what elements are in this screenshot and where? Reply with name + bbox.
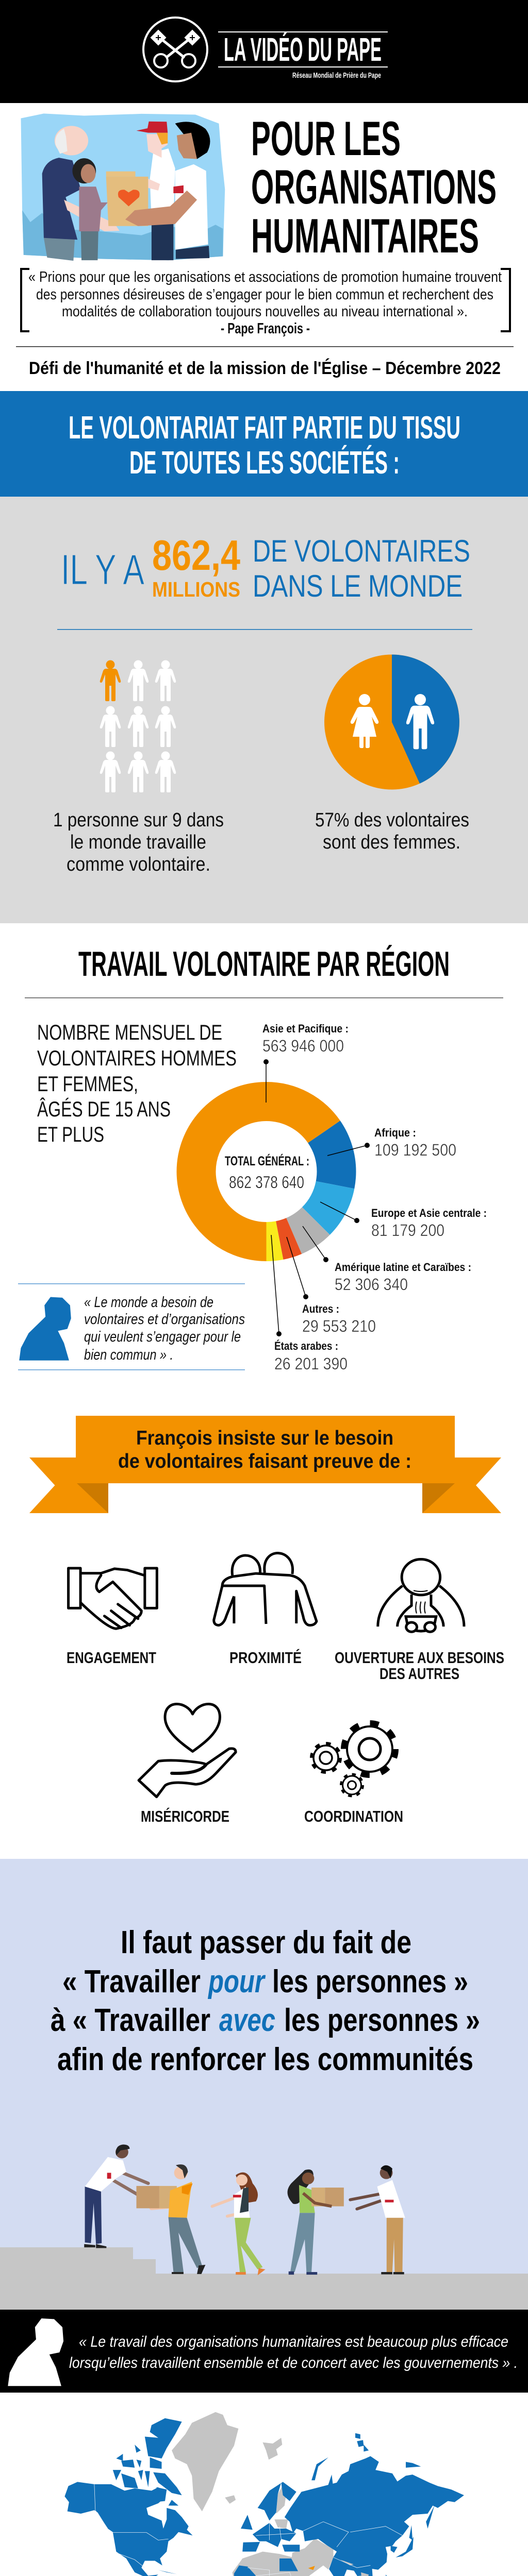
region labels: Afrique :: [374, 1126, 416, 1139]
label: openness: DES AUTRES: [380, 1665, 459, 1683]
figure 2: [169, 2164, 205, 2274]
stat text: women share: 57% des volontaires: [315, 809, 469, 831]
headline number: DANS LE MONDE: [253, 569, 463, 603]
world map: [64, 2412, 464, 2576]
label: coordination: COORDINATION: [304, 1807, 403, 1825]
black quote band: [0, 2310, 528, 2393]
figure 1: [84, 2145, 129, 2248]
panel: global volunteer stats: [0, 497, 528, 923]
text block: monthly number: NOMBRE MENSUEL DE: [37, 1020, 222, 1044]
arctic islands: [145, 2418, 182, 2459]
heading: les personnes »: [272, 1964, 468, 1999]
label: mercy: MISÉRICORDE: [141, 1807, 229, 1825]
grey countries: [172, 2412, 451, 2576]
region labels: 563 946 000: [262, 1037, 344, 1055]
figure 4: [288, 2170, 344, 2275]
donut chart: regions: 862 378 640: [229, 1173, 304, 1192]
ground and steps: [0, 2247, 528, 2310]
stat text: one in nine: le monde travaille: [70, 832, 206, 853]
ribbon heading: François insiste sur le besoin: [136, 1427, 393, 1449]
quote text: volontaires et d’organisations: [84, 1311, 245, 1328]
text block: monthly number: ÂGÉS DE 15 ANS: [37, 1097, 171, 1121]
stat text: women share: sont des femmes.: [323, 832, 460, 853]
heading: [51, 1925, 480, 2077]
region labels: 109 192 500: [374, 1141, 456, 1159]
japan and korea: [391, 2525, 414, 2557]
ribbon heading: [29, 1416, 501, 1513]
scandinavia and europe: [258, 2482, 296, 2520]
callout: quote on volunteers: [18, 1283, 245, 1370]
illustration: volunteers passing boxes: [84, 2145, 405, 2275]
text block: monthly number: VOLONTAIRES HOMMES: [37, 1046, 237, 1070]
heading: à « Travailler: [51, 2003, 210, 2038]
north america: [64, 2482, 193, 2576]
logo subtitle: Réseau Mondial de Prière du Pape: [292, 71, 381, 80]
region labels: États arabes :: [274, 1340, 338, 1352]
headline number: MILLIONS: [152, 578, 240, 601]
icon: gears: [312, 1723, 395, 1795]
leader lines: [263, 1059, 370, 1336]
prayer quote with brackets: - Pape François -: [221, 320, 310, 337]
figure 3: [234, 2173, 266, 2275]
region labels: 26 201 390: [274, 1354, 348, 1373]
headline number: [61, 531, 470, 603]
pictogram: one in nine people: [100, 660, 176, 792]
quote text: bien commun » .: [84, 1347, 173, 1363]
region labels: Europe et Asie centrale :: [371, 1207, 487, 1219]
logo: crossed keys: [143, 18, 207, 81]
heading: les personnes »: [284, 2003, 480, 2038]
stat text: one in nine: [53, 809, 224, 875]
quote text: qui veulent s’engager pour le: [84, 1329, 241, 1345]
stat text: one in nine: 1 personne sur 9 dans: [53, 809, 224, 831]
stat text: women share: [315, 809, 469, 853]
main title: [251, 111, 497, 263]
figure 5: [377, 2165, 405, 2274]
logo rule bottom: [218, 66, 388, 67]
country borders: [94, 2484, 402, 2576]
logo title: LA VIDÉO DU PAPE: [224, 31, 382, 68]
grey overlays: [161, 2560, 384, 2576]
region labels: 52 306 340: [335, 1275, 408, 1294]
icon: embrace: [214, 1553, 317, 1625]
blue countries: [64, 2418, 464, 2576]
prayer quote with brackets: modalités de collaboration toujours nouvelles au niveau international ».: [62, 303, 468, 320]
label: openness: [335, 1649, 504, 1683]
logo rule top: [218, 31, 388, 32]
panel: working with people: [0, 1859, 528, 2310]
pie chart: women share: [324, 654, 459, 789]
region labels: Amérique latine et Caraïbes :: [335, 1261, 471, 1274]
header band: [0, 0, 528, 103]
ribbon heading: de volontaires faisant preuve de :: [118, 1450, 411, 1472]
heading: avec: [219, 2003, 275, 2038]
heading: pour: [207, 1964, 266, 1999]
africa parts: [279, 2558, 298, 2571]
donut chart: regions: [196, 1022, 487, 1373]
icon: handshake: [69, 1568, 157, 1629]
eurasia: [285, 2456, 464, 2576]
headline number: DE VOLONTAIRES: [253, 534, 470, 568]
text block: monthly number: [37, 1020, 237, 1146]
headline number: IL Y A: [61, 546, 144, 594]
text block: monthly number: ET FEMMES,: [37, 1072, 138, 1096]
illustration: volunteers handing a box: [21, 113, 225, 261]
donut chart: regions: TOTAL GÉNÉRAL :: [225, 1154, 309, 1168]
region labels: 29 553 210: [302, 1317, 376, 1335]
south east asia: [386, 2574, 394, 2576]
stat text: one in nine: comme volontaire.: [67, 854, 210, 875]
label: engagement: ENGAGEMENT: [67, 1649, 156, 1667]
quote text: « Le monde a besoin de: [84, 1294, 213, 1311]
box 1: [137, 2186, 177, 2208]
blue banner: [0, 391, 528, 497]
quote text: [69, 2333, 518, 2371]
icon: open person with cup: [378, 1560, 464, 1632]
prayer quote with brackets: [21, 269, 510, 337]
heading: « Travailler: [62, 1964, 201, 1999]
main title: POUR LES: [251, 111, 401, 165]
region labels: Autres :: [302, 1302, 339, 1315]
text block: monthly number: ET PLUS: [37, 1122, 104, 1146]
region labels: Asie et Pacifique :: [262, 1022, 349, 1035]
icon: heart in hand: [139, 1704, 236, 1797]
icon: pope silhouette blue: [19, 1297, 71, 1361]
heading: Il faut passer du fait de: [121, 1925, 411, 1960]
region labels: [262, 1022, 487, 1373]
headline number: 862,4: [152, 531, 240, 579]
quote text: [84, 1294, 245, 1363]
region labels: 81 179 200: [371, 1221, 444, 1240]
icon: pope silhouette white: [8, 2318, 63, 2386]
label: proximity: PROXIMITÉ: [229, 1649, 302, 1667]
orange countries: [182, 2566, 315, 2576]
